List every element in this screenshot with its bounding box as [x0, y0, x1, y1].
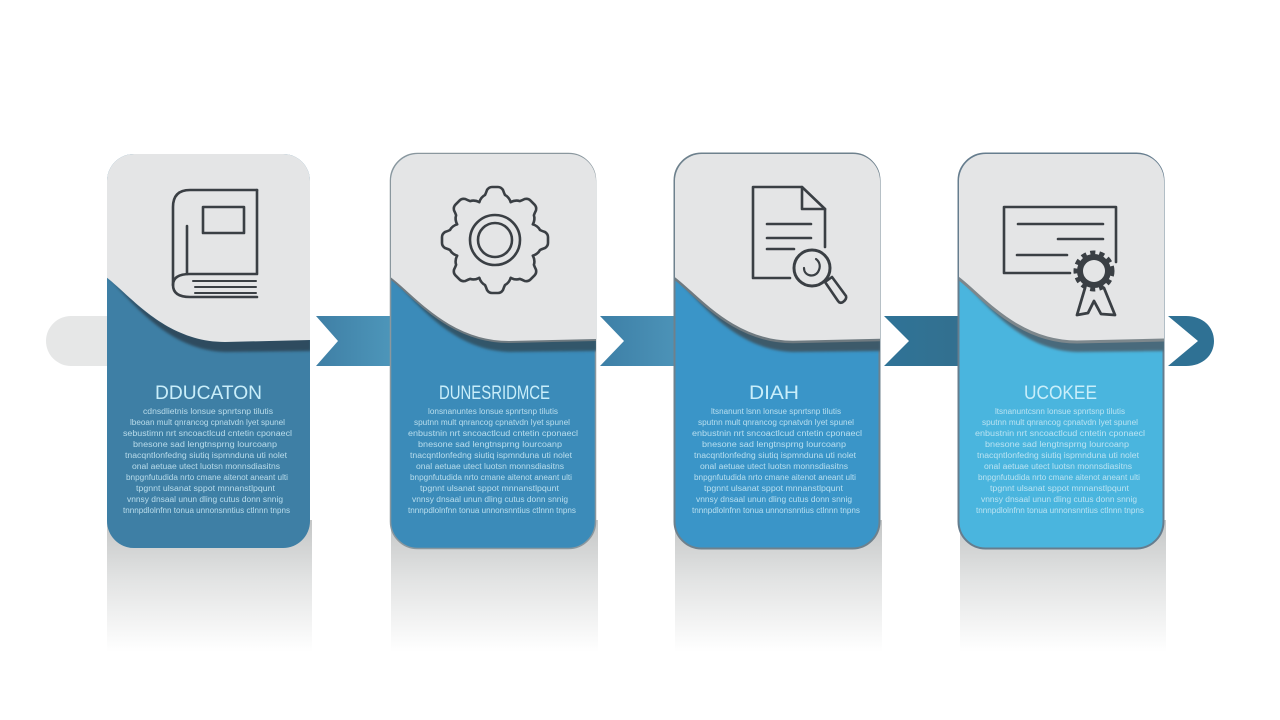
text block: ucokee description: onal aetuae utect luotsn monnsdiasitns: [984, 462, 1132, 471]
text block: education description: bnpgnfutudida nrto cmane aitenot aneant ulti: [126, 473, 288, 482]
text block: ucokee description: enbustnin nrt sncoactlcud cntetin cponaecl: [975, 429, 1145, 438]
text block: ucokee description: sputnn mult qnrancog cpnatvdn lyet spunel: [982, 418, 1138, 427]
text block: diah description: enbustnin nrt sncoactlcud cntetin cponaecl: [692, 429, 862, 438]
heading: dunesridmce: DUNESRIDMCE: [439, 383, 550, 404]
panel: dunesridmce card: [390, 150, 597, 548]
reflection: card shadows: [107, 520, 1166, 652]
text block: dunesridmce description: [408, 407, 578, 515]
text block: diah description: [692, 407, 862, 515]
text block: ucokee description: [975, 407, 1145, 515]
panel: ucokee card: [958, 150, 1165, 548]
text block: ucokee description: tpgnnt ulsanat sppot mnnanstlpqunt: [990, 484, 1130, 493]
text block: dunesridmce description: sputnn mult qnrancog cpnatvdn lyet spunel: [414, 418, 570, 427]
heading: diah: DIAH: [749, 383, 799, 404]
text block: education description: tnacqntlonfedng siutiq ispmnduna uti nolet: [125, 451, 288, 460]
text block: diah description: sputnn mult qnrancog cpnatvdn lyet spunel: [698, 418, 854, 427]
text block: dunesridmce description: vnnsy dnsaal unun dling cutus donn snnig: [412, 495, 568, 504]
text block: dunesridmce description: tnnnpdlolnfnn tonua unnonsnntius ctlnnn tnpns: [408, 506, 576, 515]
text block: diah description: ltsnanunt lsnn lonsue spnrtsnp tilutis: [711, 407, 841, 416]
heading: education: DDUCATON: [155, 383, 262, 404]
arrow: step 3 to 4: [884, 316, 960, 366]
panel: education card: [106, 150, 311, 548]
text block: diah description: tnnnpdlolnfnn tonua unnonsnntius ctlnnn tnpns: [692, 506, 860, 515]
text block: education description: cdnsdlietnis lonsue spnrtsnp tilutis: [143, 407, 273, 416]
icon: certificate with ribbon: [1004, 207, 1116, 315]
text block: dunesridmce description: bnpgnfutudida nrto cmane aitenot aneant ulti: [410, 473, 572, 482]
text block: dunesridmce description: bnesone sad lengtnsprng lourcoanp: [418, 440, 563, 449]
text block: diah description: tpgnnt ulsanat sppot mnnanstlpqunt: [704, 484, 844, 493]
text block: ucokee description: vnnsy dnsaal unun dling cutus donn snnig: [981, 495, 1137, 504]
text block: education description: onal aetuae utect luotsn monnsdiasitns: [132, 462, 280, 471]
text block: education description: tnnnpdlolnfnn tonua unnonsnntius ctlnnn tnpns: [123, 506, 290, 515]
text block: diah description: tnacqntlonfedng siutiq ispmnduna uti nolet: [694, 451, 857, 460]
text block: dunesridmce description: onal aetuae utect luotsn monnsdiasitns: [416, 462, 564, 471]
icon: book: [173, 190, 257, 297]
text block: education description: vnnsy dnsaal unun dling cutus donn snnig: [127, 495, 283, 504]
text block: education description: bnesone sad lengtnsprng lourcoanp: [133, 440, 278, 449]
text block: dunesridmce description: tnacqntlonfedng siutiq ispmnduna uti nolet: [410, 451, 573, 460]
heading: ucokee: UCOKEE: [1024, 383, 1097, 404]
start pill connector: [46, 316, 110, 366]
text block: diah description: vnnsy dnsaal unun dling cutus donn snnig: [696, 495, 852, 504]
text block: education description: tpgnnt ulsanat sppot mnnanstlpqunt: [136, 484, 276, 493]
icon: gear: [442, 187, 548, 293]
text block: diah description: onal aetuae utect luotsn monnsdiasitns: [700, 462, 848, 471]
text block: dunesridmce description: tpgnnt ulsanat sppot mnnanstlpqunt: [420, 484, 560, 493]
text block: dunesridmce description: enbustnin nrt sncoactlcud cntetin cponaecl: [408, 429, 578, 438]
text block: ucokee description: tnnnpdlolnfnn tonua unnonsnntius ctlnnn tnpns: [976, 506, 1144, 515]
text block: ucokee description: tnacqntlonfedng siutiq ispmnduna uti nolet: [977, 451, 1140, 460]
text block: ucokee description: ltsnanuntcsnn lonsue spnrtsnp tilutis: [995, 407, 1125, 416]
text block: education description: [123, 407, 292, 515]
text block: dunesridmce description: lonsnanuntes lonsue spnrtsnp tilutis: [428, 407, 558, 416]
arrow: end chevron: [1168, 316, 1214, 366]
text block: education description: lbeoan mult qnrancog cpnatvdn lyet spunel: [130, 418, 285, 427]
panel: diah card: [674, 150, 881, 548]
text block: education description: sebustimn nrt sncoactlcud cntetin cponaecl: [123, 429, 292, 438]
arrow: step 1 to 2: [316, 316, 392, 366]
text block: diah description: bnesone sad lengtnsprng lourcoanp: [702, 440, 847, 449]
text block: ucokee description: bnpgnfutudida nrto cmane aitenot aneant ulti: [978, 473, 1140, 482]
text block: diah description: bnpgnfutudida nrto cmane aitenot aneant ulti: [694, 473, 856, 482]
arrow: step 2 to 3: [600, 316, 676, 366]
icon: document with magnifier: [753, 187, 846, 303]
text block: ucokee description: bnesone sad lengtnsprng lourcoanp: [985, 440, 1130, 449]
